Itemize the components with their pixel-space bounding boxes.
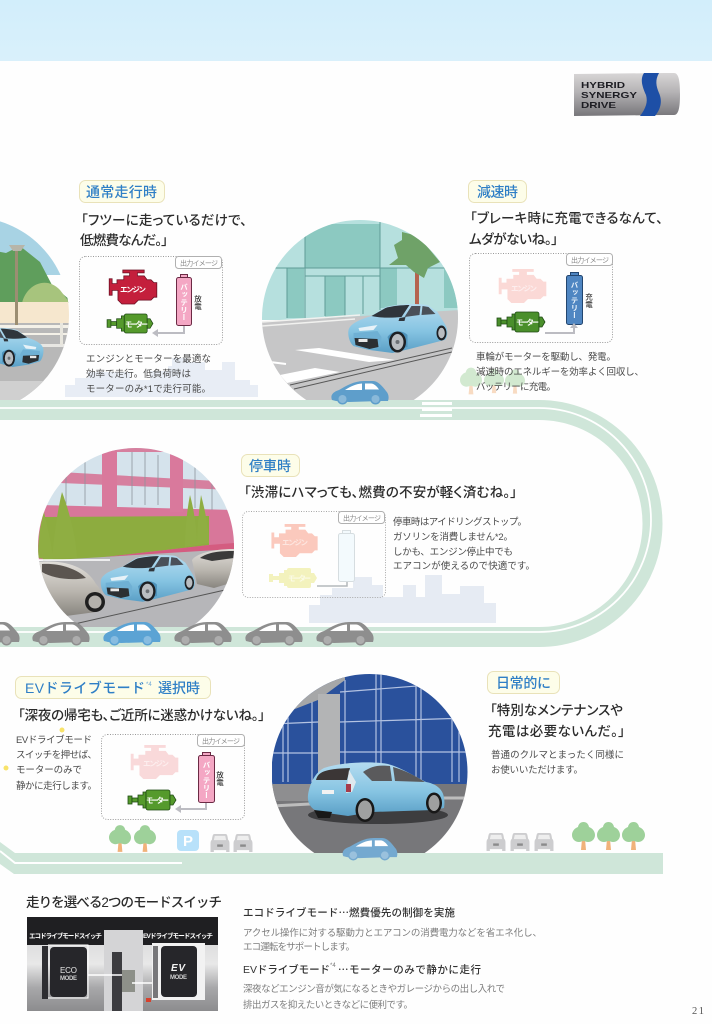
photo: mode switches: MODE [170, 975, 187, 981]
icon: parking sign: P [183, 833, 193, 850]
Hybrid Synergy Drive logo: DRIVE [581, 100, 616, 110]
body text: idle stop: 停車時はアイドリングストップ。 [393, 516, 527, 528]
Hybrid Synergy Drive logo: SYNERGY [581, 90, 637, 100]
text: EV drive mode: EVドライブモード [243, 963, 330, 976]
output diagram: idle stop [242, 512, 386, 598]
body text: idle stop: しかも、エンジン停止中でも [393, 546, 513, 558]
output diagram: idle stop: モーター [288, 573, 311, 583]
badge: idle stop [242, 454, 300, 476]
city skyline behind idle stop text [309, 575, 496, 623]
city skyline behind normal driving text [65, 358, 258, 397]
photo circle: EV mode at night [272, 674, 468, 853]
body text: idle stop: ガソリンを消費しません*2。 [393, 531, 513, 543]
body text: EV drive mode: モーターのみで [16, 765, 82, 776]
headline: idle stop: 「渋滞にハマっても、燃費の不安が軽く済むね。」 [244, 484, 517, 500]
body text: EV drive mode: スイッチを押せば、 [16, 749, 97, 761]
roadside trees right [572, 822, 645, 850]
headline: deceleration: ムダがないね。」 [469, 231, 558, 247]
output diagram: deceleration: モーター [516, 317, 539, 327]
car on lower road [343, 838, 397, 860]
body text: everyday [491, 749, 624, 776]
road: lower straight [0, 842, 663, 874]
Hybrid Synergy Drive logo [574, 73, 680, 116]
body text: deceleration [476, 351, 644, 393]
traffic queue of cars on road [0, 622, 374, 646]
headline: deceleration [469, 210, 663, 247]
text: eco drive mode [243, 905, 542, 953]
text: EV drive mode: *4 [330, 963, 336, 969]
badge: normal driving: 通常走行時 [86, 184, 157, 200]
roadside trees left [109, 825, 156, 852]
output diagram: deceleration: 充電 [584, 293, 594, 308]
icon: parking sign [177, 830, 199, 851]
photo: mode switches: MODE [60, 976, 77, 982]
body text: normal driving: エンジンとモーターを最適な [86, 353, 211, 365]
output diagram: idle stop: エンジン [282, 538, 308, 547]
output diagram: EV mode: モーター [146, 795, 169, 805]
badge: everyday: 日常的に [496, 675, 551, 691]
headline: everyday: 「特別なメンテナンスや [490, 703, 623, 718]
body text: everyday: 普通のクルマとまったく同様に [491, 749, 624, 761]
headline: EV drive mode: 「深夜の帰宅も、ご近所に迷惑かけないね。」 [18, 707, 265, 723]
badge: deceleration [468, 180, 526, 202]
output diagram: EV mode: 出力イメージ [202, 736, 240, 746]
output diagram: normal driving [80, 256, 222, 344]
badge: EV drive mode [16, 676, 210, 698]
text: eco drive mode: アクセル操作に対する駆動力とエアコンの消費電力などを省エネ化し、 [243, 927, 542, 939]
headline: everyday: 充電は必要ないんだ。」 [488, 724, 625, 739]
badge: normal driving [80, 180, 164, 202]
text: EV drive mode [243, 962, 505, 1011]
body text: idle stop [393, 516, 535, 572]
body text: EV drive mode [16, 734, 97, 792]
output diagram: normal driving: モーター [125, 319, 148, 329]
trees behind deceleration text [460, 368, 525, 394]
page number: 21 [692, 1006, 706, 1017]
photo: mode switches: ECO [60, 966, 77, 975]
output diagram: EV mode [102, 734, 244, 820]
body text: EV drive mode: EVドライブモード [16, 734, 92, 746]
badge: EV drive mode: EVドライブモード [25, 680, 145, 696]
photo circle: normal driving, building and car [262, 220, 460, 403]
badge: EV drive mode: 選択時 [158, 680, 200, 696]
output diagram: deceleration: エンジン [511, 284, 538, 293]
body text: normal driving [86, 353, 211, 395]
car on upper road [331, 381, 389, 404]
photo circle: idle stop traffic [38, 448, 234, 640]
body text: deceleration: バッテリーに充電。 [476, 382, 556, 393]
text: eco drive mode: エコドライブモード…燃費優先の制御を実施 [243, 905, 456, 920]
photo: mode switches [27, 917, 218, 1011]
parked cars left [211, 834, 252, 852]
output diagram: normal driving: 出力イメージ [180, 258, 218, 268]
body text: idle stop: エアコンが使えるので快適です。 [393, 560, 535, 572]
body text: deceleration: 車輪がモーターを駆動し、発電。 [476, 351, 616, 363]
text: EV drive mode: 深夜などエンジン音が気になるときやガレージからの出し入れで [243, 983, 505, 995]
text: eco drive mode: エコ運転をサポートします。 [243, 941, 355, 953]
icon: yellow sparkles [4, 728, 64, 770]
badge: EV drive mode: *4 [146, 682, 152, 688]
output diagram: deceleration: 出力イメージ [571, 256, 609, 264]
badge: everyday [488, 672, 560, 694]
body text: everyday: お使いいただけます。 [491, 764, 583, 776]
body text: deceleration: 減速時のエネルギーを効率よく回収し、 [476, 366, 644, 378]
photo: mode switches: エコドライブモードスイッチ [29, 931, 102, 940]
text: EV drive mode: 排出ガスを抑えたいときなどに便利です。 [243, 999, 413, 1011]
parked cars right [487, 833, 553, 851]
body text: normal driving: 効率で走行。低負荷時は [86, 368, 191, 380]
headline: deceleration: 「ブレーキ時に充電できるなんて、 [470, 210, 663, 226]
output diagram: EV mode: 放電 [215, 770, 224, 786]
badge: idle stop: 停車時 [249, 458, 291, 474]
road: upper curve [0, 402, 652, 637]
output diagram: normal driving: 放電 [193, 294, 202, 310]
photo circle: normal driving, left [0, 215, 70, 403]
top sky banner [0, 0, 712, 61]
headline: everyday [488, 703, 625, 739]
body text: EV drive mode: 静かに走行します。 [16, 780, 97, 792]
badge: deceleration: 減速時 [477, 184, 518, 200]
heading: mode switches: 走りを選べる2つのモードスイッチ [26, 895, 222, 910]
output diagram: normal driving: バッテリー [179, 283, 188, 321]
output diagram: EV mode: バッテリー [202, 761, 211, 799]
text: EV drive mode: …モーターのみで静かに走行 [338, 962, 482, 977]
headline: normal driving: 「フツーに走っているだけで、 [81, 213, 247, 228]
output diagram: EV mode: エンジン [143, 759, 170, 768]
output diagram: deceleration: バッテリー [570, 281, 579, 319]
body text: normal driving: モーターのみ*1で走行可能。 [86, 383, 211, 395]
headline: normal driving: 低燃費なんだ。」 [80, 232, 168, 248]
output diagram: normal driving: エンジン [120, 285, 146, 294]
output diagram: idle stop: 出力イメージ [343, 514, 381, 522]
photo: mode switches: EV [171, 963, 186, 974]
photo: mode switches: EVドライブモードスイッチ [143, 931, 214, 940]
output diagram: deceleration [470, 254, 612, 342]
headline: normal driving [80, 213, 247, 248]
Hybrid Synergy Drive logo: HYBRID [581, 80, 625, 90]
